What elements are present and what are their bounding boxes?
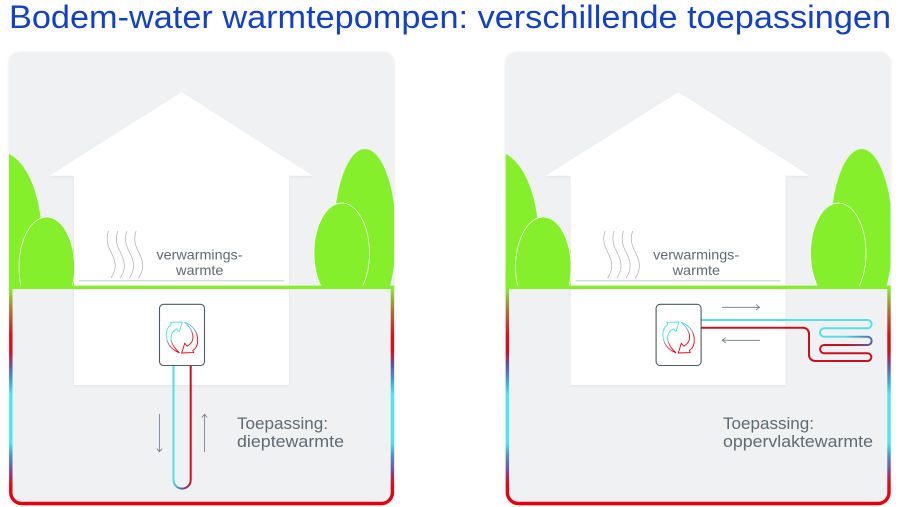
heat pump unit xyxy=(160,304,204,366)
floor line xyxy=(576,280,781,282)
panel: oppervlaktewarmte xyxy=(505,52,892,506)
heating label xyxy=(653,246,739,278)
heating label: warmte xyxy=(175,262,224,278)
application label: Toepassing: xyxy=(723,415,814,433)
heat waves xyxy=(604,231,639,278)
title: Bodem-water warmtepompen: verschillende toepassingen xyxy=(9,0,891,35)
ground frame xyxy=(11,287,392,504)
heating label: verwarmings- xyxy=(653,246,739,262)
heating label: warmte xyxy=(672,262,720,278)
application label: dieptewarmte xyxy=(237,433,344,451)
house xyxy=(49,92,313,385)
ground pipe xyxy=(174,366,191,489)
surface collector pipes xyxy=(701,320,872,361)
panel: dieptewarmte xyxy=(0,52,396,505)
heating label: verwarmings- xyxy=(156,246,243,262)
heat waves xyxy=(107,231,143,278)
ground frame xyxy=(507,287,889,504)
application label: oppervlaktewarmte xyxy=(723,433,873,451)
floor line xyxy=(79,280,284,282)
trees xyxy=(506,149,891,287)
trees xyxy=(9,149,394,287)
application label: Toepassing: xyxy=(237,415,328,433)
application label xyxy=(723,415,873,451)
application label xyxy=(237,415,344,451)
flow arrows xyxy=(722,305,760,343)
house xyxy=(546,92,810,385)
heat pump unit xyxy=(656,304,701,366)
flow arrows xyxy=(157,414,207,452)
panel background xyxy=(506,52,891,505)
heating label xyxy=(156,246,243,278)
panel background xyxy=(9,52,394,505)
